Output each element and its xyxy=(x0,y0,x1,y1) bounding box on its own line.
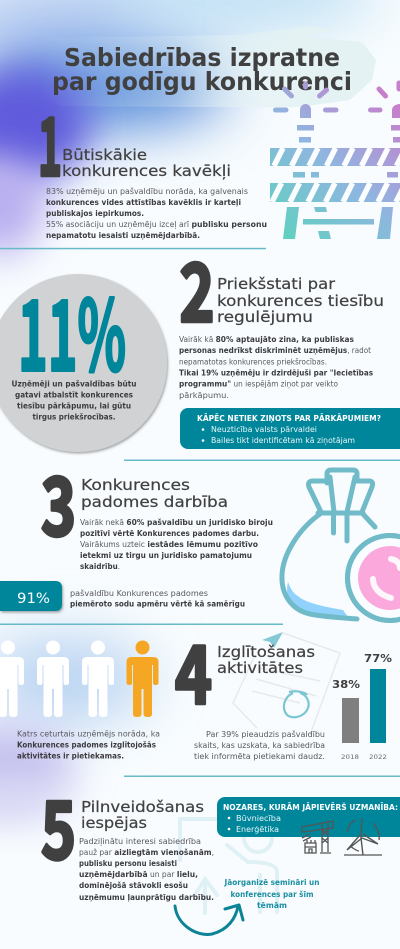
body text: tiek informēta pietiekami daudz. xyxy=(194,752,325,761)
icon: faint presentation xyxy=(180,819,277,913)
icon: pictogram of four people xyxy=(0,640,158,717)
body text: Vairākums uzteic iestādes lēmumu pozitīvo xyxy=(80,540,258,549)
caption xyxy=(12,380,136,422)
callout: seminars: konferences par šīm xyxy=(230,890,314,899)
body text: uzņēmumu ļaunprātīgu darbību. xyxy=(79,893,214,902)
body text: skaidrību. xyxy=(80,562,120,571)
section 2: preconceptions xyxy=(0,230,400,461)
caption: gatavi atbalstīt konkurences xyxy=(15,390,134,400)
stat text: piemēroto sodu apmēru vērtē kā samērīgu xyxy=(70,600,245,608)
body text: 83% uzņēmēju un pašvaldību norāda, ka galvenais xyxy=(46,187,248,197)
body text xyxy=(79,837,214,902)
heading: padomes darbība xyxy=(81,493,228,511)
divider xyxy=(124,460,400,461)
body text: nepamatotu iesaisti uzņēmējdarbībā. xyxy=(46,231,200,240)
body text: konkurences vides attīstības kavēklis ir karteļi xyxy=(46,198,241,207)
body text: programmu" un iespējām ziņot par veikto xyxy=(179,380,338,390)
body text: uzņēmējdarbībā un par lielu, xyxy=(79,870,198,879)
heading: konkurences tiesību xyxy=(217,292,384,310)
body text: Tikai 19% uzņēmēju ir dzirdējuši par "Iecietības xyxy=(179,368,374,378)
bar chart: 77% xyxy=(364,652,392,665)
body text: personas nedrīkst diskriminēt uzņēmējus, radot xyxy=(179,346,371,355)
bar chart: 2018 xyxy=(341,753,359,761)
heading xyxy=(62,146,231,180)
callout: seminars xyxy=(224,878,320,910)
heading: iespējas xyxy=(81,814,147,832)
divider xyxy=(124,776,400,777)
divider xyxy=(0,624,283,625)
box: why violations are not reported: Bailes tikt identificētam kā ziņotājam xyxy=(211,436,355,446)
section 5: areas for improvement xyxy=(41,767,400,934)
heading: aktivitātes xyxy=(217,659,303,677)
body text: nepamatotas konkurences priekšrocības. xyxy=(179,358,327,366)
box: why violations are not reported: KĀPĒC NETIEK ZIŅOTS PAR PĀRKĀPUMIEM? xyxy=(197,414,381,423)
body text: pauž par aizliegtām vienošanām, xyxy=(79,848,214,857)
icon: faint paper with plane xyxy=(233,632,340,735)
section 3: Competition Council activity xyxy=(0,444,400,625)
heading: konkurences kavēkļi xyxy=(62,162,231,180)
heading: regulējumu xyxy=(217,308,313,326)
heading: Izglītošanas xyxy=(217,643,315,661)
bar chart: 2022 xyxy=(369,753,387,761)
bar chart: 38% xyxy=(332,678,360,691)
number 4: 4 xyxy=(175,612,212,728)
number 5: 5 xyxy=(41,767,76,883)
body text: Vairāk nekā 60% pašvaldību un juridisko biroju xyxy=(80,518,273,527)
body text: Padziļinātu interesi sabiedrība xyxy=(79,837,201,847)
text under pictogram: aktivitātes ir pietiekamas. xyxy=(17,752,124,760)
icon: money bag xyxy=(282,470,400,620)
heading: Priekšstati par xyxy=(217,275,336,293)
circle callout: 11% xyxy=(0,258,167,452)
body text: ietekmi uz tirgu un juridisko pamatojumu xyxy=(80,551,252,560)
heading xyxy=(217,275,384,326)
caption: tirgus priekšrocības. xyxy=(32,412,116,422)
body text xyxy=(46,187,267,240)
section 4: educational activities xyxy=(0,612,400,777)
box: why violations are not reported xyxy=(180,408,400,449)
callout: seminars: tēmām xyxy=(257,901,287,910)
text under pictogram xyxy=(17,730,160,760)
body text: 55% asociāciju un uzņēmēju izceļ arī publisku personu xyxy=(46,220,267,230)
text under pictogram: Konkurences padomes izglītojošās xyxy=(17,740,157,750)
box: sectors needing attention: Enerģētika xyxy=(236,825,279,834)
heading: Būtiskākie xyxy=(62,146,147,164)
title: Sabiedrības izpratne xyxy=(64,43,340,72)
body text: Vairāk kā 80% aptaujāto zina, ka publiskas xyxy=(179,335,355,344)
number 2: 2 xyxy=(180,230,214,346)
stat text xyxy=(70,589,245,608)
box: sectors needing attention: Būvniecība xyxy=(236,814,281,823)
stat box 91% xyxy=(0,581,62,611)
body text xyxy=(194,730,325,761)
body text: pārkāpumu. xyxy=(179,391,229,400)
body text: dominējošā stāvokli esošu xyxy=(79,881,188,890)
caption: Uzņēmēji un pašvaldības būtu xyxy=(12,380,136,388)
bar chart xyxy=(332,652,392,761)
arrow: curved xyxy=(175,905,243,934)
caption: tiesību pārkāpumu, lai gūtu xyxy=(17,402,131,410)
body text xyxy=(179,335,374,400)
box: sectors needing attention xyxy=(217,797,400,837)
body text: pozitīvi vērtē Konkurences padomes darbu. xyxy=(80,529,259,538)
title xyxy=(52,43,352,96)
divider xyxy=(0,248,266,249)
section 1: key obstacles xyxy=(0,83,400,249)
heading xyxy=(217,643,315,677)
heading xyxy=(81,476,228,511)
box: sectors needing attention: NOZARES, KURĀM JĀPIEVĒRŠ UZMANĪBA: xyxy=(223,803,398,812)
heading: Pilnveidošanas xyxy=(81,798,204,816)
heading: Konkurences xyxy=(81,476,190,494)
icon: crane and wind turbine xyxy=(302,818,382,855)
text under pictogram: Katrs ceturtais uzņēmējs norāda, ka xyxy=(17,730,160,740)
big figure 11%: 11% xyxy=(18,258,126,398)
number 1: 1 xyxy=(38,84,62,200)
title: par godīgu konkurenci xyxy=(52,67,352,96)
body text: publiskajos iepirkumos. xyxy=(46,209,144,218)
stat box 91%: 91% xyxy=(17,591,50,607)
number 3: 3 xyxy=(41,444,76,560)
callout: seminars: Jāorganizē semināri un xyxy=(224,878,320,887)
brush stroke behind title xyxy=(28,26,376,107)
body text: publisku personu iesaisti xyxy=(79,859,177,868)
heading xyxy=(81,798,204,832)
box: why violations are not reported: Neuzticība valsts pārvaldei xyxy=(211,425,317,434)
body text: Par 39% pieaudzis pašvaldību xyxy=(206,730,325,739)
icon: road barrier xyxy=(263,83,400,239)
body text xyxy=(80,518,273,571)
body text: skaits, kas uzskata, ka sabiedrība xyxy=(194,741,325,750)
stat text: pašvaldību Konkurences padomes xyxy=(70,589,208,598)
